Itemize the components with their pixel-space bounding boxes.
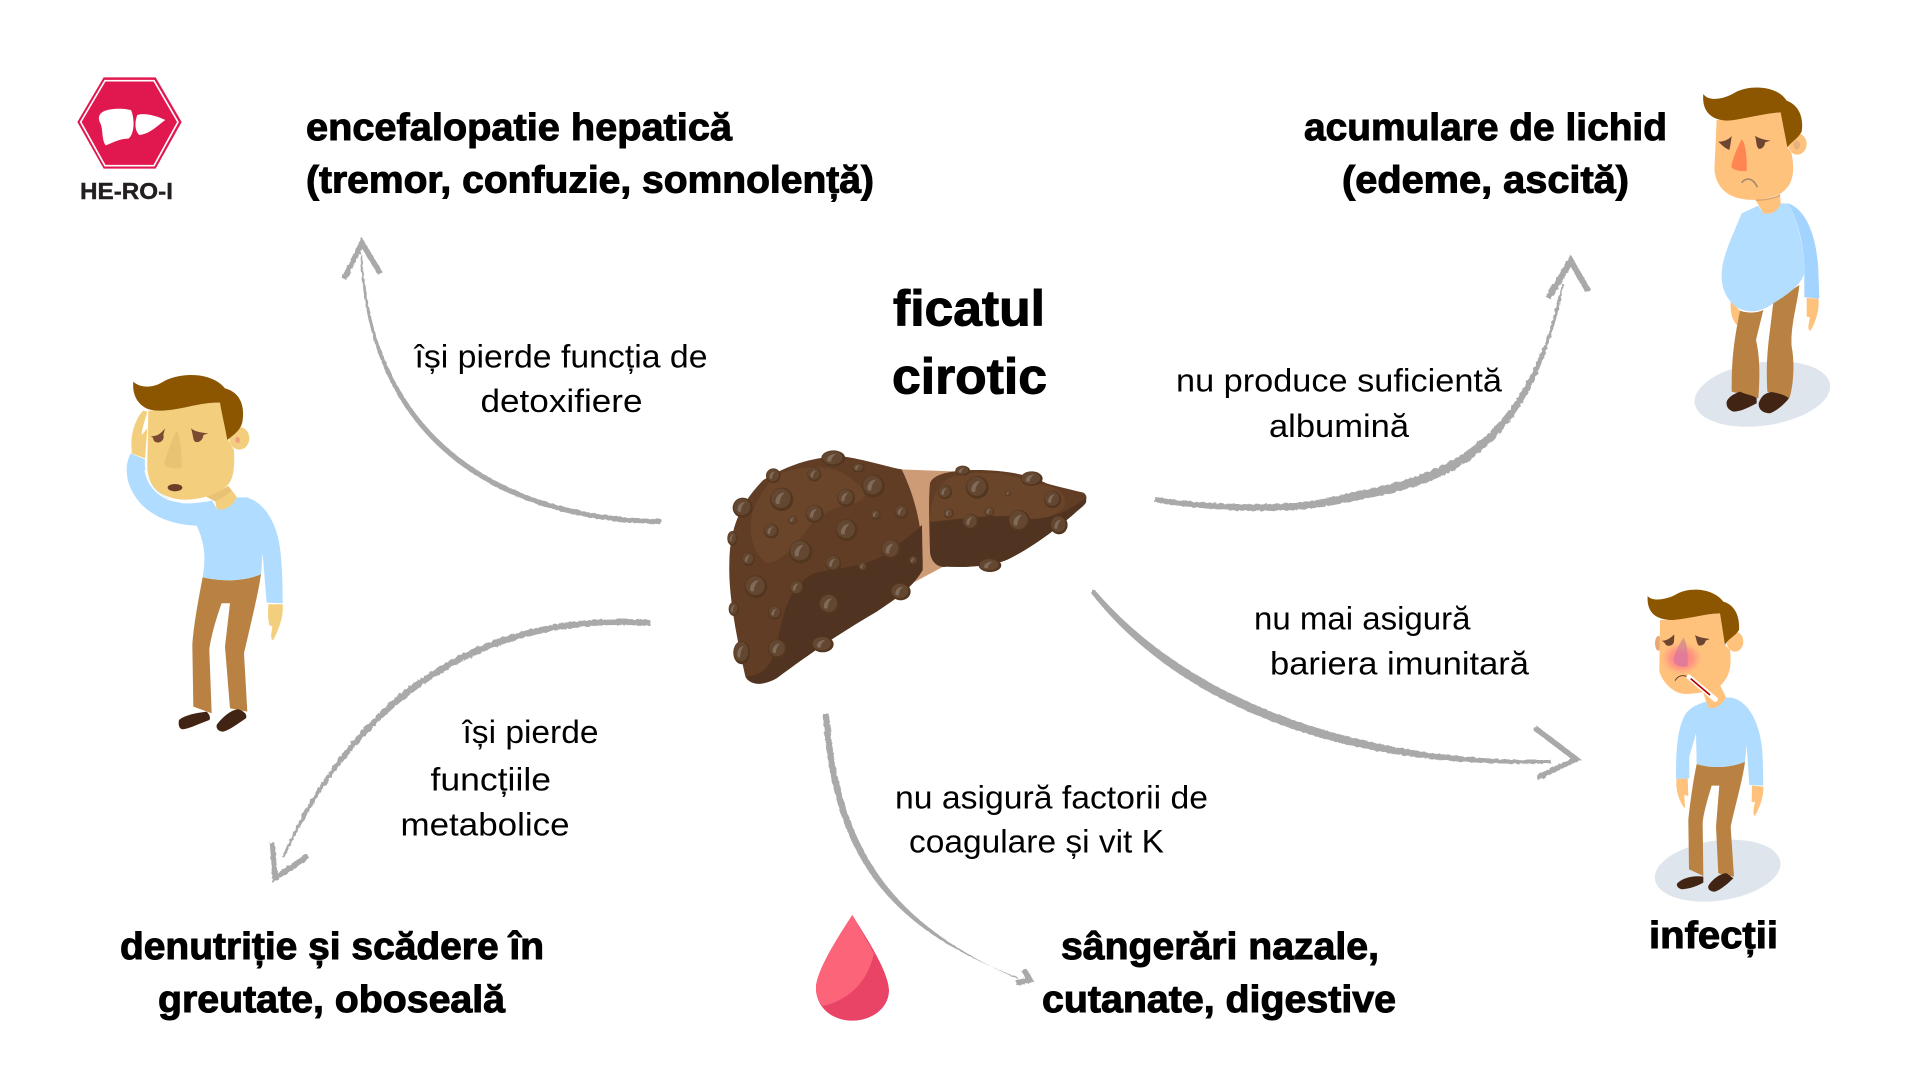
left lobe xyxy=(929,470,1086,567)
text: detoxifiere xyxy=(413,338,708,419)
arrow: to infectii xyxy=(1091,589,1576,778)
heading: acumulare de lichid: (edeme, ascită) xyxy=(1342,160,1629,202)
text: factori de coagulare: nu asigură factorii de xyxy=(895,780,1208,816)
heading: acumulare de lichid: acumulare de lichid xyxy=(1304,107,1667,149)
title: ficatul cirotic: cirotic xyxy=(892,348,1047,404)
text: albumina: albumină xyxy=(1269,408,1409,444)
arrow: to encefalopatie xyxy=(344,243,661,524)
title: ficatul cirotic: ficatul xyxy=(893,280,1045,336)
figure: man with headache xyxy=(127,375,283,732)
arrow: to sangerari xyxy=(823,714,1030,983)
text: bariera imunitara: nu mai asigură xyxy=(1254,600,1471,636)
text: detoxifiere: își pierde funcția de xyxy=(413,338,708,374)
text: bariera imunitara xyxy=(1254,600,1529,682)
logo: HE-RO-I xyxy=(77,77,182,204)
text: bariera imunitara: bariera imunitară xyxy=(1270,646,1529,682)
figure: man with ascites xyxy=(1690,87,1834,435)
figure: man with fever xyxy=(1648,590,1785,909)
text: factori de coagulare: coagulare și vit K xyxy=(909,824,1164,860)
title: ficatul cirotic xyxy=(892,280,1047,404)
heading: encefalopatie hepatica: (tremor, confuzie, somnolență) xyxy=(306,160,874,202)
text: functiile metabolice: metabolice xyxy=(400,806,570,842)
heading: sangerari: cutanate, digestive xyxy=(1042,979,1396,1021)
text: functiile metabolice: își pierde xyxy=(461,714,598,750)
text: functiile metabolice: funcțiile xyxy=(430,762,551,798)
heading: encefalopatie hepatica xyxy=(306,107,874,202)
heading: acumulare de lichid xyxy=(1304,107,1667,202)
text: factori de coagulare xyxy=(895,780,1208,860)
heading: denutritie: greutate, oboseală xyxy=(158,979,506,1021)
heading: denutritie: denutriție și scădere în xyxy=(120,926,544,968)
heading: infectii: infecții xyxy=(1649,915,1778,957)
heading: denutritie xyxy=(120,926,544,1021)
right lobe xyxy=(729,457,923,684)
text: albumina: nu produce suficientă xyxy=(1176,362,1502,398)
icon: red hexagon with liver xyxy=(77,77,182,169)
heading: sangerari xyxy=(1042,926,1396,1021)
heading: encefalopatie hepatica: encefalopatie hepatică xyxy=(306,107,733,149)
arrow: to denutritie xyxy=(272,619,650,878)
text: functiile metabolice xyxy=(400,714,598,842)
logo wordmark: HE-RO-I xyxy=(80,178,173,204)
arrow: to acumulare de lichid xyxy=(1154,261,1588,511)
liver nodules xyxy=(727,450,1068,664)
text: albumina xyxy=(1176,362,1502,444)
central liver xyxy=(727,450,1086,684)
text: detoxifiere: detoxifiere xyxy=(480,383,642,419)
heading: sangerari: sângerări nazale, xyxy=(1061,926,1379,968)
liver ligament xyxy=(900,469,953,583)
icon: blood drop xyxy=(816,915,889,1021)
